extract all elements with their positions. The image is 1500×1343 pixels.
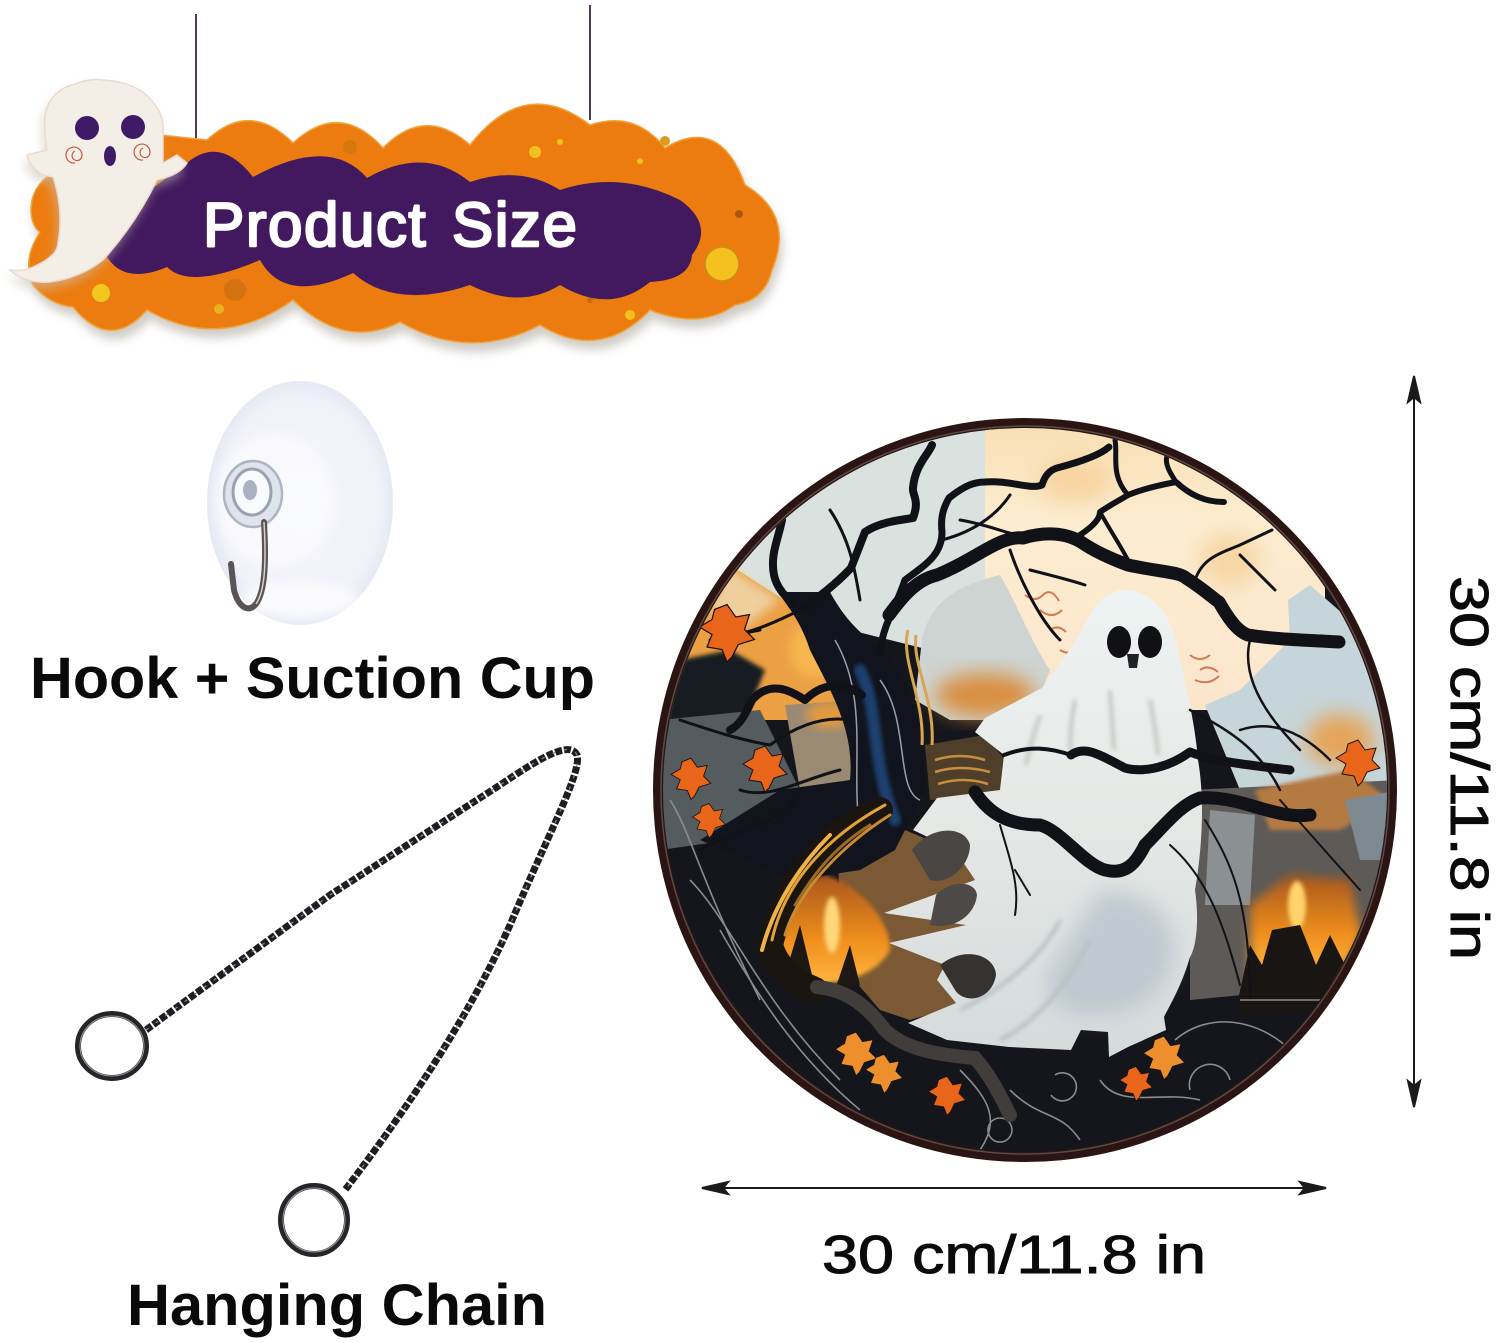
peach sky	[985, 420, 1325, 710]
label: horizontal dimension: 30 cm/11.8 in	[822, 1225, 1206, 1285]
hem holes	[912, 831, 970, 881]
main tree branches	[680, 440, 1360, 1000]
wood knot beside ghost arm	[925, 735, 1005, 800]
felt dots	[92, 136, 743, 320]
tree trunk	[700, 592, 1005, 880]
dark foliage	[670, 649, 768, 720]
outer rim	[653, 418, 1397, 1162]
ghost face	[1107, 626, 1131, 658]
pale blue-grey panes, upper left	[715, 428, 1001, 648]
sky warm patches	[1037, 458, 1260, 586]
ghost body	[884, 590, 1202, 1057]
dark base	[668, 588, 1340, 1152]
label: hook and suction cup: Hook + Suction Cup	[30, 646, 595, 711]
lower-right panes	[1190, 780, 1400, 1000]
pale blue right mountains	[1205, 585, 1387, 792]
grey lower-left panes	[660, 710, 800, 850]
banner title: Product Size	[203, 191, 577, 260]
arrow: horizontal dimension	[702, 1182, 1326, 1194]
glass artwork	[650, 415, 1400, 1165]
red squiggles on sky	[1025, 592, 1219, 682]
icon: hook and suction cup	[207, 381, 393, 625]
icon: hanging chain	[78, 750, 578, 1254]
hanging strings	[196, 5, 590, 140]
banner: Product Size	[7, 5, 782, 352]
label: hanging chain: Hanging Chain	[127, 1273, 547, 1338]
cloth shading	[1047, 890, 1175, 1015]
stained glass suncatcher	[650, 415, 1400, 1165]
thick root band	[817, 987, 1010, 1115]
left fire glow	[778, 875, 890, 985]
grey leading lines on dark border	[670, 800, 1350, 1160]
wavy limb across ghost	[1071, 751, 1290, 770]
brown ground behind ghost hem	[838, 830, 980, 1020]
grey cloak-like mountain behind ghost	[915, 575, 1050, 720]
twisted golden roots	[762, 805, 890, 990]
thin black cracks	[1000, 825, 1030, 915]
golden bark streaks	[906, 630, 932, 745]
left orange sunset	[670, 570, 836, 720]
right fire glow	[1250, 875, 1362, 975]
left wavy limbs	[730, 686, 862, 730]
purple cloud plate	[107, 152, 701, 299]
arrow: vertical dimension	[1408, 376, 1420, 1107]
orange cloud board	[29, 104, 782, 352]
label: vertical dimension: 30 cm/11.8 in	[1439, 576, 1499, 960]
orange maple leaves	[671, 604, 1380, 1115]
ghost mascot	[7, 80, 187, 289]
